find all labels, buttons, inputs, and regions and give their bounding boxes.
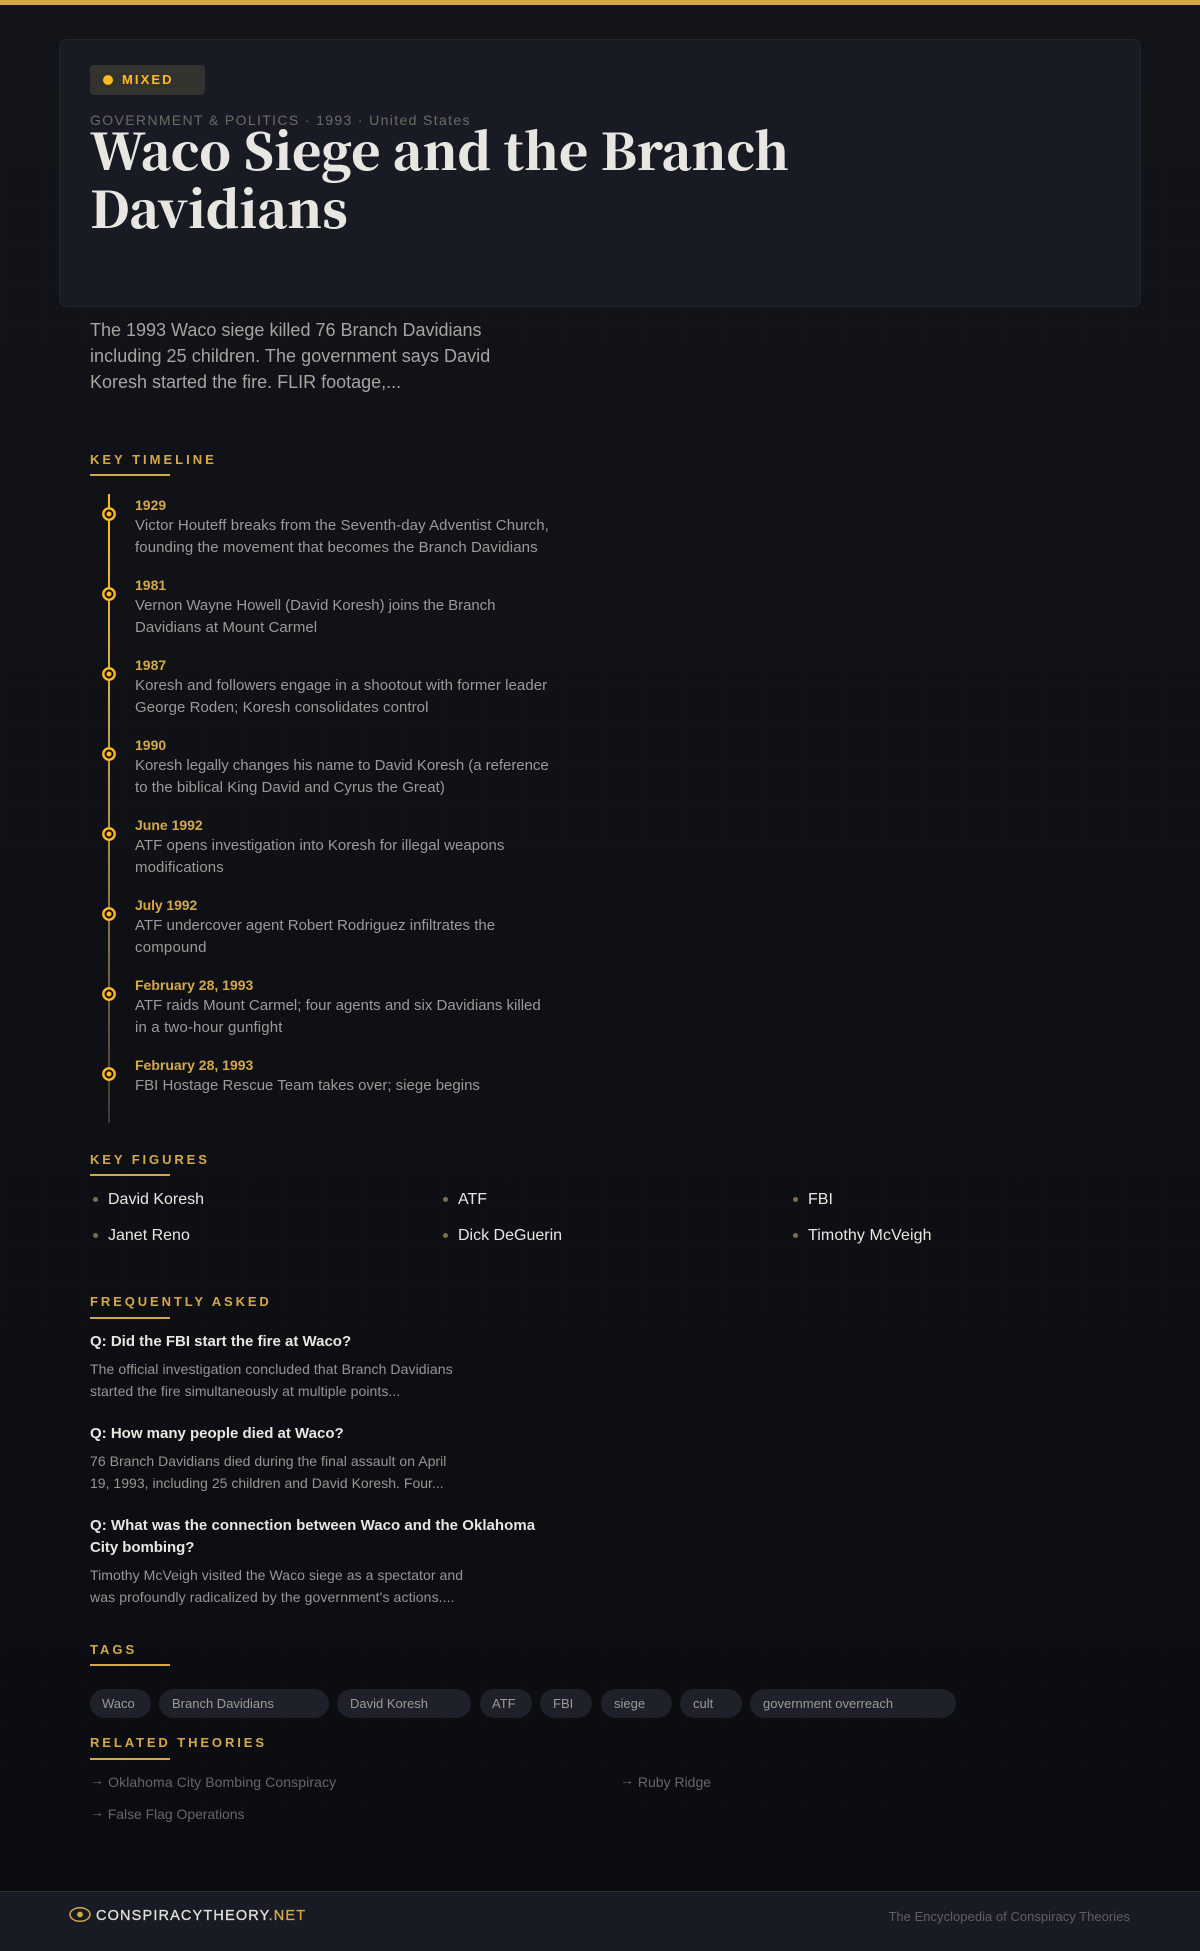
tag: Branch Davidians (159, 1689, 329, 1718)
event February 28, 1993 siege (102, 1057, 480, 1094)
footer (0, 1891, 1200, 1951)
panel: key figures (90, 1152, 932, 1244)
answer 1: The official investigation concluded that Branch Davidians (90, 1361, 453, 1377)
figure: Janet Reno: Janet Reno (108, 1227, 190, 1244)
tag: government overreach: government overreach (763, 1696, 893, 1711)
category meta: GOVERNMENT & POLITICS · 1993 · United States (90, 112, 471, 128)
link: Oklahoma City Bombing Conspiracy: → Oklahoma City Bombing Conspiracy (90, 1772, 336, 1790)
figure: FBI: FBI (808, 1191, 833, 1208)
answer 3 (90, 1567, 463, 1605)
event February 28, 1993 raid (102, 977, 541, 1036)
figure: ATF (443, 1191, 487, 1208)
top accent bar (0, 0, 1200, 5)
question 3: Q: What was the connection between Waco and the Oklahoma (90, 1517, 535, 1534)
heading: key figures: KEY FIGURES (90, 1152, 210, 1167)
event June 1992: June 1992 (135, 817, 203, 833)
panel: key timeline (90, 452, 549, 1123)
title: Waco Siege and the Branch (90, 113, 789, 185)
figure: David Koresh: David Koresh (108, 1191, 204, 1208)
event February 28, 1993 raid: in a two-hour gunfight (135, 1019, 283, 1036)
question 3 (90, 1517, 536, 1556)
event 1929 (102, 497, 549, 556)
event June 1992 (102, 817, 504, 876)
footer logo: CONSPIRACYTHEORY.NET (96, 1908, 306, 1924)
event June 1992: ATF opens investigation into Koresh for illegal weapons (135, 837, 504, 854)
link: False Flag Operations: → False Flag Operations (90, 1804, 244, 1822)
event July 1992: compound (135, 939, 207, 956)
event February 28, 1993 siege: FBI Hostage Rescue Team takes over; siege begins (135, 1077, 480, 1094)
tag: Waco: Waco (102, 1696, 135, 1711)
icon: eye (69, 1907, 91, 1922)
figure: Dick DeGuerin: Dick DeGuerin (458, 1227, 562, 1244)
figure: FBI (793, 1191, 833, 1208)
answer 3: Timothy McVeigh visited the Waco siege as a spectator and (90, 1567, 463, 1583)
figure: ATF: ATF (458, 1191, 487, 1208)
event 1990: 1990 (135, 737, 166, 753)
summary: Koresh started the fire. FLIR footage,... (90, 372, 401, 392)
event 1987 (102, 657, 547, 716)
summary: The 1993 Waco siege killed 76 Branch Davidians (90, 320, 482, 340)
link: Ruby Ridge: → Ruby Ridge (620, 1772, 711, 1790)
badge: mixed (90, 65, 205, 95)
question 1: Q: Did the FBI start the fire at Waco? (90, 1333, 351, 1350)
tag: FBI (540, 1689, 592, 1718)
summary: including 25 children. The government says David (90, 346, 490, 366)
event February 28, 1993 raid: February 28, 1993 (135, 977, 253, 993)
title (90, 113, 789, 243)
event June 1992: modifications (135, 859, 224, 876)
event 1990 (102, 737, 549, 796)
tag: government overreach (750, 1689, 956, 1718)
tag: siege (601, 1689, 672, 1718)
event 1929: Victor Houteff breaks from the Seventh-day Adventist Church, (135, 517, 549, 534)
tag: David Koresh: David Koresh (350, 1696, 428, 1711)
event February 28, 1993 raid: ATF raids Mount Carmel; four agents and six Davidians killed (135, 997, 541, 1014)
heading: frequently asked: FREQUENTLY ASKED (90, 1294, 272, 1309)
title: Davidians (90, 171, 348, 243)
tag: cult: cult (693, 1696, 713, 1711)
heading: tags: TAGS (90, 1642, 137, 1657)
event 1990: Koresh legally changes his name to David Koresh (a reference (135, 757, 549, 774)
event 1987: George Roden; Koresh consolidates control (135, 699, 428, 716)
tag: cult (680, 1689, 742, 1718)
tag: Waco (90, 1689, 151, 1718)
event 1981: Davidians at Mount Carmel (135, 619, 317, 636)
event 1981 (102, 577, 495, 636)
summary (90, 320, 490, 392)
event February 28, 1993 siege: February 28, 1993 (135, 1057, 253, 1073)
answer 2: 76 Branch Davidians died during the final assault on April (90, 1453, 446, 1469)
answer 1: started the fire simultaneously at multiple points... (90, 1383, 400, 1399)
tag: ATF (480, 1689, 532, 1718)
event 1929: 1929 (135, 497, 166, 513)
event July 1992: July 1992 (135, 897, 197, 913)
answer 3: was profoundly radicalized by the government's actions.... (90, 1589, 455, 1605)
event 1987: Koresh and followers engage in a shootout with former leader (135, 677, 547, 694)
footer tagline: The Encyclopedia of Conspiracy Theories (888, 1909, 1130, 1924)
event 1981: 1981 (135, 577, 166, 593)
event July 1992: ATF undercover agent Robert Rodriguez infiltrates the (135, 917, 495, 934)
event July 1992 (102, 897, 495, 956)
tag: ATF: ATF (492, 1696, 516, 1711)
event 1987: 1987 (135, 657, 166, 673)
event 1929: founding the movement that becomes the Branch Davidians (135, 539, 538, 556)
tag: siege: siege (614, 1696, 645, 1711)
heading: related theories: RELATED THEORIES (90, 1735, 267, 1750)
question 3: City bombing? (90, 1539, 194, 1556)
panel: hero header (59, 39, 1141, 392)
heading: key timeline: KEY TIMELINE (90, 452, 217, 467)
answer 1 (90, 1361, 453, 1399)
answer 2: 19, 1993, including 25 children and David Koresh. Four... (90, 1475, 444, 1491)
event 1990: to the biblical King David and Cyrus the Great) (135, 779, 445, 796)
timeline spine (108, 494, 110, 1123)
event 1981: Vernon Wayne Howell (David Koresh) joins the Branch (135, 597, 495, 614)
question 2: Q: How many people died at Waco? (90, 1425, 344, 1442)
answer 2 (90, 1453, 446, 1491)
tag: Branch Davidians: Branch Davidians (172, 1696, 274, 1711)
tag: FBI: FBI (553, 1696, 573, 1711)
badge: mixed: MIXED (122, 72, 174, 87)
figure: Timothy McVeigh: Timothy McVeigh (808, 1227, 932, 1244)
tag: David Koresh (337, 1689, 471, 1718)
